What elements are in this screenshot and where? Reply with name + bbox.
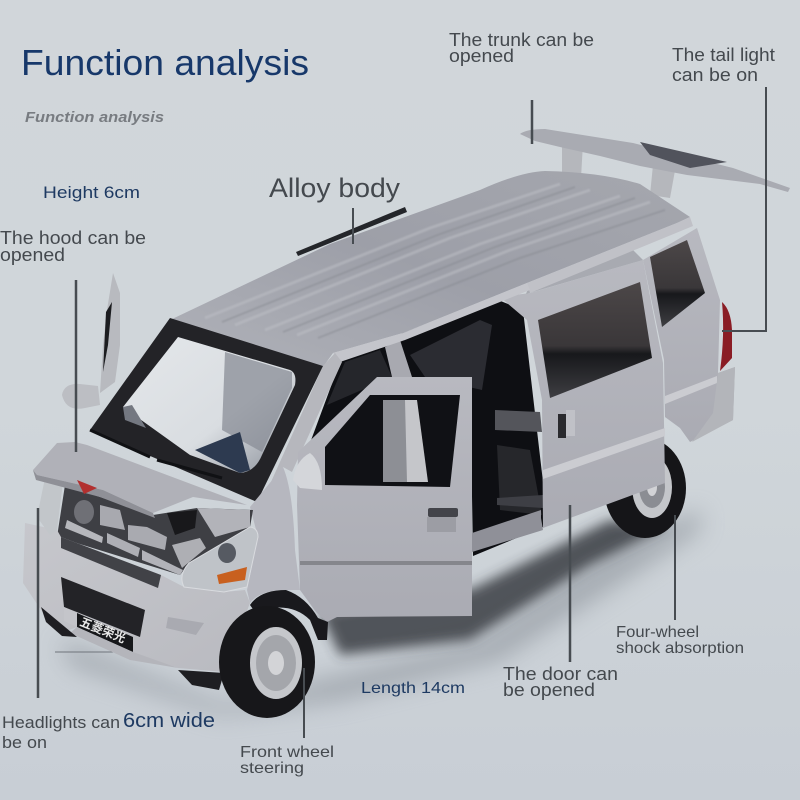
label: front wheel [240, 668, 334, 777]
left headlight [37, 478, 63, 535]
label: width: 6cm wide [123, 710, 215, 732]
label: hood [0, 228, 146, 452]
interior seats [327, 320, 543, 515]
windscreen [90, 318, 323, 502]
tail light [720, 302, 732, 371]
plate surround and bumper centre [64, 607, 77, 627]
label: alloy body [269, 173, 401, 244]
front lower body [23, 523, 250, 672]
interior opening [300, 298, 548, 556]
label: door [503, 505, 618, 700]
label: hood: The hood can be [0, 228, 146, 248]
far roof rail [296, 207, 407, 256]
label: shock absorption [616, 515, 744, 657]
label: headlights [2, 508, 120, 752]
label: door: The door can [503, 664, 618, 684]
subtitle: Function analysis [25, 109, 164, 126]
upper grille [61, 537, 161, 588]
label: shock absorption: shock absorption [616, 640, 744, 657]
label: tail light [672, 45, 775, 331]
label: door: be opened [503, 680, 595, 700]
fog lamp [166, 617, 204, 635]
door mirror [293, 453, 322, 490]
label: trunk: The trunk can be [449, 30, 594, 50]
tailgate struts [562, 143, 676, 198]
label: trunk: opened [449, 46, 514, 66]
label: front wheel: steering [240, 760, 304, 777]
tailgate open [520, 129, 790, 192]
lower grille [61, 577, 145, 637]
rear wheel [604, 438, 686, 538]
label: tail light: can be on [672, 65, 758, 85]
front door [297, 377, 472, 622]
label: headlights: Headlights can [2, 713, 120, 732]
far side open door [100, 273, 120, 393]
wheel arch [250, 590, 328, 640]
bumper underside [41, 607, 77, 637]
right headlight [182, 527, 258, 592]
rear body crease [665, 376, 717, 404]
label: hood: opened [0, 245, 65, 265]
label: length: Length 14cm [361, 680, 465, 697]
ground shadow [55, 510, 700, 715]
label: headlights: be on [2, 733, 47, 752]
right fender [247, 467, 300, 603]
licence plate: 五菱荣光 [78, 613, 128, 647]
label: shock absorption: Four-wheel [616, 624, 699, 641]
roof [170, 171, 693, 367]
label: height: Height 6cm [43, 183, 140, 202]
sliding door [500, 250, 665, 528]
far side mirror [62, 384, 100, 409]
van illustration [23, 129, 790, 718]
label: trunk [449, 30, 594, 144]
engine bay [57, 485, 253, 575]
side step sill [472, 510, 543, 552]
rear window [650, 240, 705, 327]
label: tail light: The tail light [672, 45, 775, 65]
front wheel [219, 606, 315, 718]
title: Function analysis [21, 42, 309, 83]
rear side panel [643, 228, 735, 442]
rear bumper shade [692, 367, 735, 442]
label: front wheel: Front wheel [240, 744, 334, 761]
label: alloy body: Alloy body [269, 173, 401, 203]
a-pillar [262, 353, 342, 502]
hood open [33, 442, 247, 518]
